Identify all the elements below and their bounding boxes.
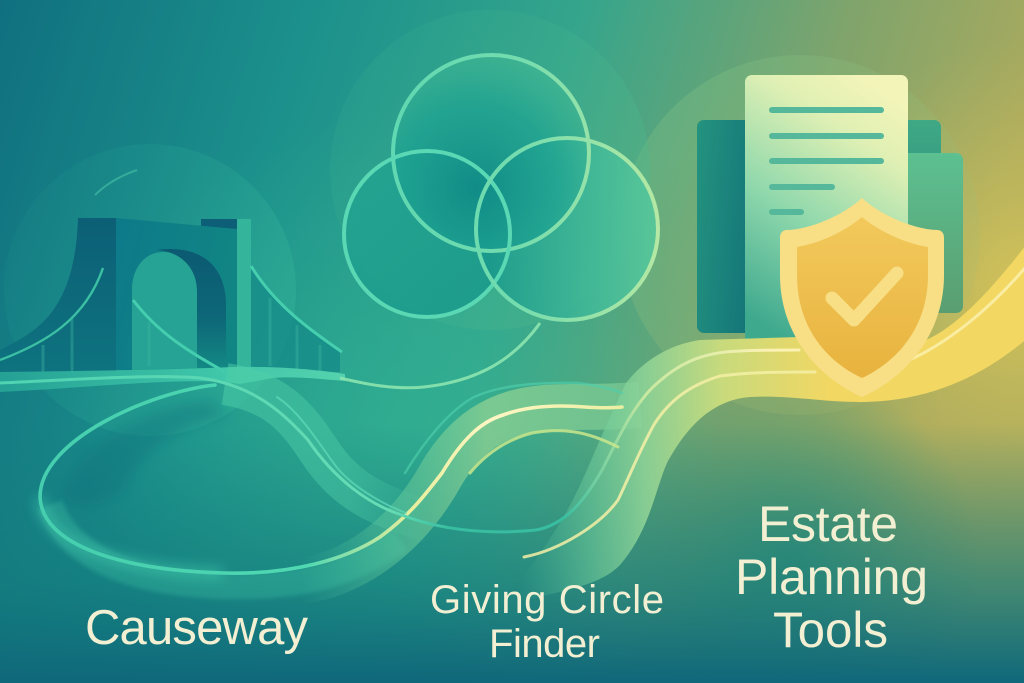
- strand: right of shield: [905, 262, 1024, 362]
- circle outline: left: [344, 151, 510, 317]
- strand: deck to lens and upper yellow line: [0, 350, 799, 532]
- circle outline: upper: [393, 55, 589, 251]
- label: Estate Planning Tools: [735, 496, 928, 658]
- flow ribbons: bright strands: [0, 262, 1024, 573]
- bridge: left dark tower with flared base: [0, 218, 116, 372]
- flow ribbons: middle band from deck: [225, 384, 430, 522]
- circle outline: right: [476, 138, 658, 320]
- flow ribbons: wave band: [300, 405, 640, 581]
- label: Estate Planning Tools: Tools: [773, 602, 888, 658]
- check mark: [832, 273, 897, 320]
- shield outer: [780, 198, 944, 397]
- bridge: arch opening fill: [132, 252, 197, 370]
- label: Estate Planning Tools: Estate: [758, 496, 898, 552]
- icon: shield with check: [780, 198, 944, 397]
- label: Causeway: Causeway: [85, 601, 308, 655]
- label: Giving Circle Finder: [430, 578, 664, 666]
- circle fill: upper: [394, 56, 588, 250]
- dark shade inside loop: [62, 400, 228, 505]
- bridge: deck band: [0, 367, 345, 392]
- strand: lens upper arc: [470, 431, 618, 473]
- strand: lower yellow line: [524, 372, 815, 557]
- thin line from deck to right circle: [340, 323, 540, 388]
- thin arc above bridge: [95, 170, 137, 195]
- folder: right front panel: [890, 153, 963, 313]
- flow ribbons: left soft glow: [40, 497, 223, 573]
- halo: behind bridge: [4, 144, 296, 436]
- strand: faint wave upper line: [405, 383, 622, 473]
- halo: behind circles: [330, 10, 650, 330]
- bridge: front tower face with arch opening: [116, 218, 237, 370]
- folder: right back tab: [890, 120, 941, 210]
- strand: loop rising to wave: [40, 385, 622, 573]
- bridge: arch inner shadow: [156, 249, 226, 368]
- label: Giving Circle Finder: Giving Circle: [430, 578, 664, 622]
- circle fill: left: [344, 151, 510, 317]
- panel: document and folder: [697, 75, 963, 345]
- flow ribbons: main yellow band to right edge: [500, 240, 1024, 605]
- document text lines: [769, 107, 884, 215]
- bridge: rear tower top block: [201, 219, 238, 231]
- circle fill: right: [477, 139, 657, 319]
- label: Giving Circle Finder: Finder: [489, 622, 600, 666]
- flow ribbons: loop soft band: [50, 505, 400, 586]
- halo: right glow behind document: [620, 55, 980, 415]
- bridge: hangers: [43, 298, 320, 372]
- strand: faint middle line: [277, 397, 406, 513]
- shield inner: [797, 217, 928, 378]
- folder: left back panel: [697, 120, 767, 333]
- bridge: right span backing: [251, 265, 340, 372]
- panel: bridge illustration: [0, 218, 345, 392]
- panel: overlapping giving circles: [344, 55, 658, 320]
- bridge: light pillar: [237, 219, 251, 367]
- bridge: cables: [0, 266, 342, 372]
- document page: [745, 75, 908, 345]
- label: Estate Planning Tools: Planning: [735, 549, 928, 605]
